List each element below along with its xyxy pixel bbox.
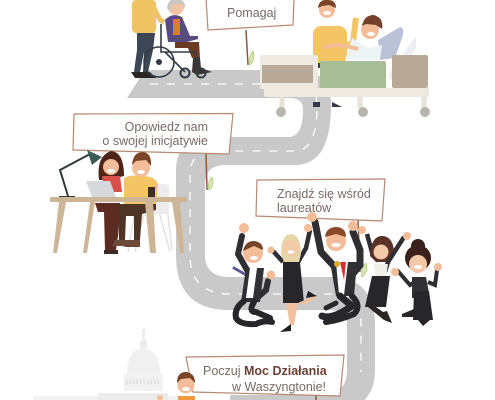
sign: Poczuj Moc Działania: w Waszyngtonie! (231, 380, 326, 394)
sign: Opowiedz nam: o swojej inicjatywie (102, 134, 208, 148)
illustration: person at the bottom (157, 372, 195, 400)
sign: Znajdź się wśród laureatów: Znajdź się wśród (277, 187, 371, 201)
sign: Pomagaj (206, 0, 294, 65)
sign: Pomagaj: Pomagaj (227, 6, 276, 20)
person 2 (268, 224, 317, 332)
person 3 (307, 212, 360, 322)
illustration: hospital bed with visitor and patient (260, 0, 430, 117)
illustration: man pushing woman in wheelchair (131, 0, 212, 78)
road (127, 70, 375, 400)
person 1 (234, 223, 276, 324)
sign: Poczuj Moc Działania: Poczuj Moc Działania (203, 364, 328, 378)
sign: Poczuj Moc Działania (186, 355, 344, 400)
illustration: jumping laureates (234, 212, 442, 332)
sign: Opowiedz nam (73, 114, 233, 190)
illustration: two people at a desk (50, 150, 187, 254)
person 5 (391, 239, 442, 326)
sign: Znajdź się wśród laureatów: laureatów (277, 201, 332, 215)
sign: Opowiedz nam: Opowiedz nam (125, 120, 208, 134)
person 4 (358, 226, 411, 323)
illustration: Capitol building (33, 329, 183, 400)
sign: Znajdź się wśród laureatów (256, 179, 385, 277)
